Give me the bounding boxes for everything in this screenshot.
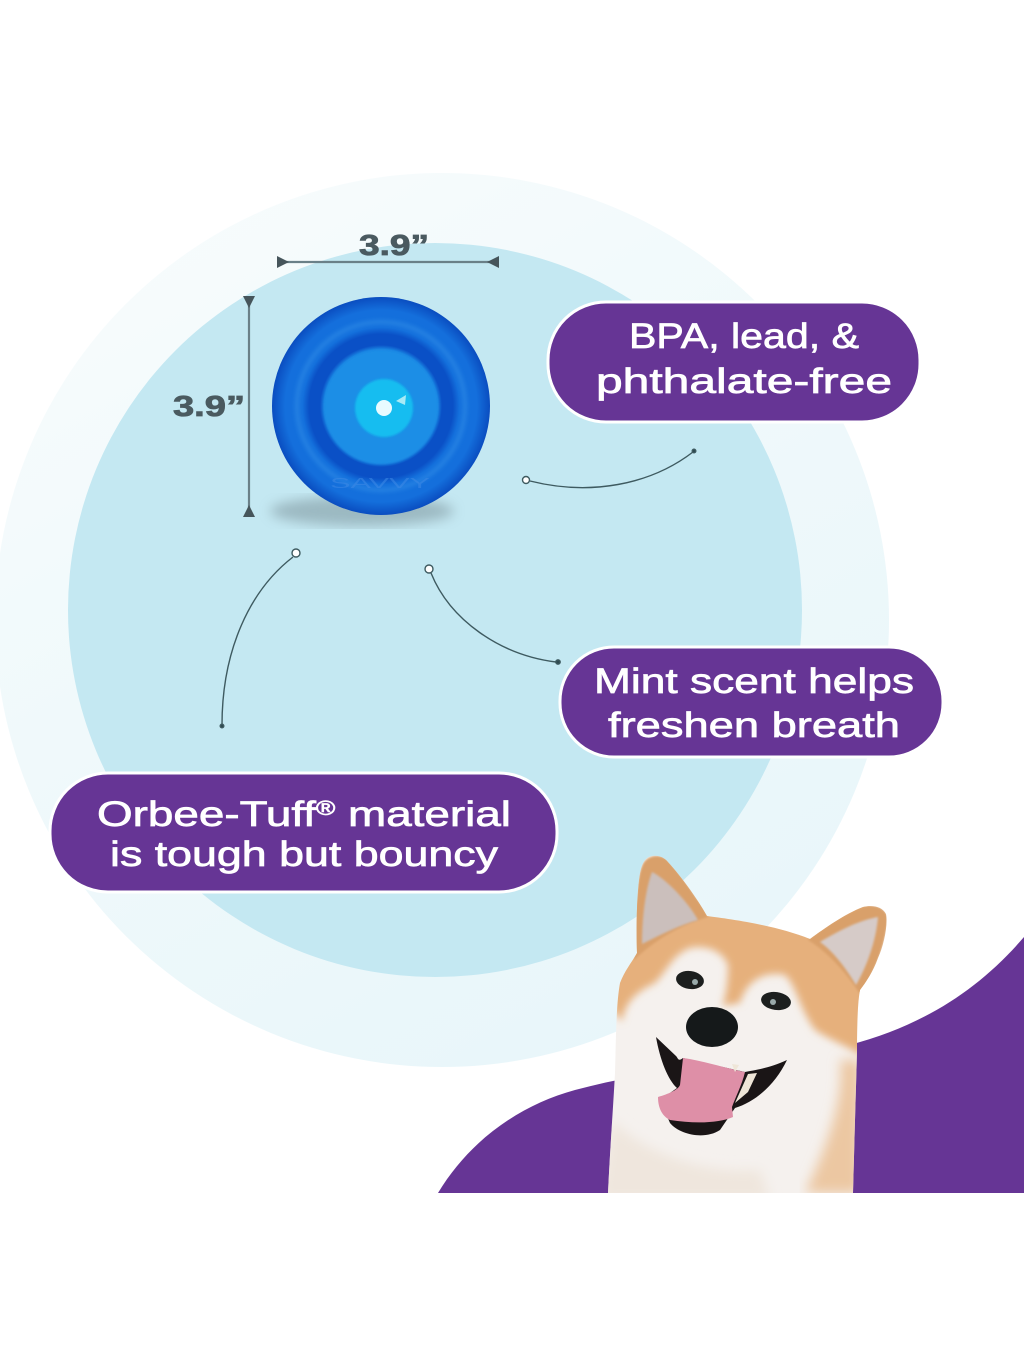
left ear bbox=[634, 856, 708, 960]
vertical dimension bbox=[173, 296, 255, 517]
eyes bbox=[675, 969, 705, 991]
connector: to material callout bbox=[220, 549, 300, 728]
callout: BPA free: phthalate-free bbox=[596, 362, 892, 401]
height label: 3.9” bbox=[173, 391, 245, 423]
infographic canvas bbox=[0, 173, 1024, 1193]
callout: material: material bbox=[335, 795, 511, 834]
callout: BPA free bbox=[548, 302, 920, 422]
callout: mint scent: freshen breath bbox=[608, 706, 900, 745]
callout: material: Orbee-Tuff bbox=[97, 795, 264, 834]
callout: material: is tough but bouncy bbox=[110, 835, 499, 874]
right ear bbox=[808, 906, 888, 994]
nose bbox=[686, 1007, 738, 1047]
inner light blue circle bbox=[68, 243, 802, 977]
ball toy: SAVVY bbox=[330, 475, 430, 492]
horizontal dimension bbox=[277, 230, 499, 268]
orange forehead and cheeks bbox=[605, 900, 870, 1060]
purple wave bbox=[438, 937, 1024, 1193]
outer pale circle bbox=[0, 173, 889, 1067]
chest shading bbox=[805, 1060, 860, 1193]
mouth bbox=[656, 1037, 787, 1135]
callout: material: ® bbox=[316, 798, 336, 820]
callout: mint scent bbox=[560, 647, 943, 757]
callout: material bbox=[50, 773, 557, 892]
shiba inu dog bbox=[608, 856, 886, 1193]
ball toy bbox=[270, 297, 490, 526]
width label: 3.9” bbox=[359, 230, 429, 262]
connector: to mint callout bbox=[425, 565, 560, 664]
teeth bbox=[732, 1064, 757, 1103]
tongue bbox=[658, 1058, 745, 1122]
connector: to BPA callout bbox=[522, 449, 696, 488]
dog base white fur bbox=[608, 856, 857, 1193]
callout: mint scent: Mint scent helps bbox=[594, 662, 914, 701]
callout: BPA free: BPA, lead, & bbox=[629, 317, 859, 356]
